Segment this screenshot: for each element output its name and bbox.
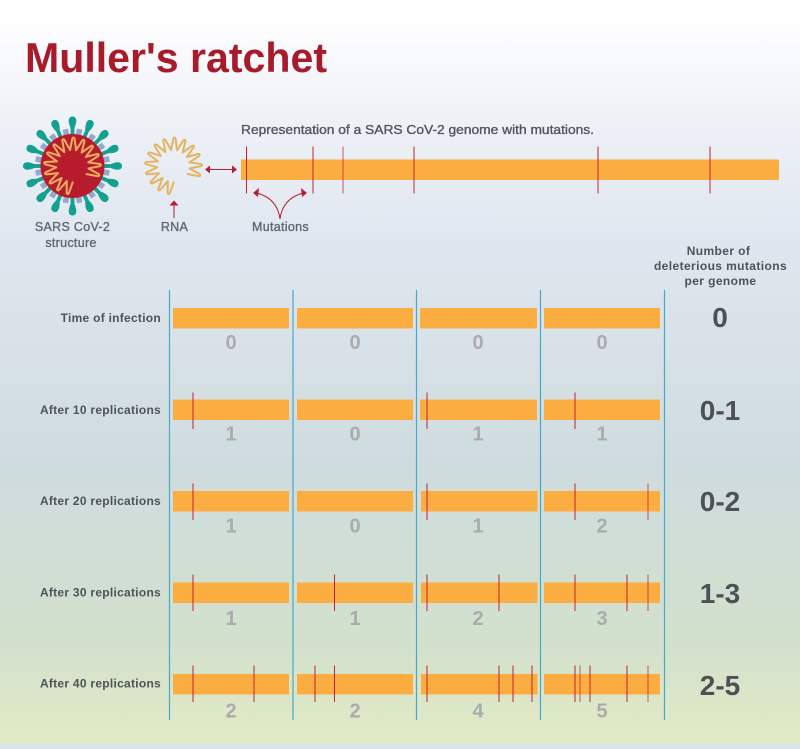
row: after 40 replications: 5	[596, 700, 608, 722]
row: after 20 replications: 0	[349, 516, 361, 538]
row: after 30 replications: 2	[472, 608, 484, 630]
row: after 20 replications: 0-2	[700, 486, 740, 517]
row: time of infection: 0	[596, 332, 608, 354]
row: after 10 replications: 1	[225, 424, 237, 446]
row: after 30 replications: 1	[225, 608, 237, 630]
heading: number of deleterious mutations per genome: Number of	[687, 244, 751, 258]
caption: Mutations: Mutations	[252, 220, 309, 234]
caption: SARS CoV-2 structure: structure	[45, 236, 97, 250]
heading: genome representation: Representation of a SARS CoV-2 genome with mutations.	[241, 123, 594, 137]
icon: SARS CoV-2 virus	[23, 116, 122, 216]
arrow: RNA to genome	[205, 166, 237, 174]
row: time of infection: 0	[472, 332, 484, 354]
row: after 20 replications: 2	[596, 516, 608, 538]
row: after 40 replications: 2	[225, 700, 237, 722]
row: after 30 replications: 1	[349, 608, 361, 630]
row: time of infection: 0	[712, 302, 728, 333]
heading: number of deleterious mutations per genome: per genome	[684, 274, 757, 288]
row: after 10 replications: 0	[349, 424, 361, 446]
row: after 40 replications: After 40 replications	[40, 676, 161, 690]
row: after 40 replications	[40, 666, 740, 722]
caption: RNA: RNA	[161, 220, 189, 234]
row: after 30 replications	[40, 574, 740, 630]
heading: number of deleterious mutations per genome: deleterious mutations	[654, 259, 787, 273]
row: after 30 replications: After 30 replications	[40, 586, 161, 600]
row: after 20 replications: 1	[225, 516, 237, 538]
row: after 30 replications: 3	[596, 608, 608, 630]
row: after 20 replications: After 20 replications	[40, 494, 161, 508]
row: after 40 replications: 2	[349, 700, 361, 722]
row: after 10 replications: 1	[596, 424, 608, 446]
row: time of infection: 0	[349, 332, 361, 354]
column dividers	[170, 290, 664, 720]
row: after 20 replications	[40, 484, 740, 538]
arrows: mutation pointers	[253, 188, 307, 219]
row: after 40 replications: 4	[472, 700, 484, 722]
row: after 10 replications: 0-1	[700, 395, 740, 426]
row: after 20 replications: 1	[472, 516, 484, 538]
row: after 30 replications: 1-3	[700, 578, 740, 609]
row: after 10 replications	[40, 392, 740, 446]
row: time of infection: Time of infection	[61, 311, 161, 325]
row: after 10 replications: After 10 replications	[40, 403, 161, 417]
title: Muller's ratchet	[25, 34, 327, 81]
arrow: RNA label pointer	[170, 200, 178, 218]
row: time of infection: 0	[225, 332, 237, 354]
genome bar with mutations	[241, 146, 779, 194]
row: after 40 replications: 2-5	[700, 670, 740, 701]
icon: RNA ring	[145, 137, 202, 195]
row: time of infection	[61, 302, 728, 354]
caption: SARS CoV-2 structure: SARS CoV-2	[35, 220, 110, 234]
row: after 10 replications: 1	[472, 424, 484, 446]
